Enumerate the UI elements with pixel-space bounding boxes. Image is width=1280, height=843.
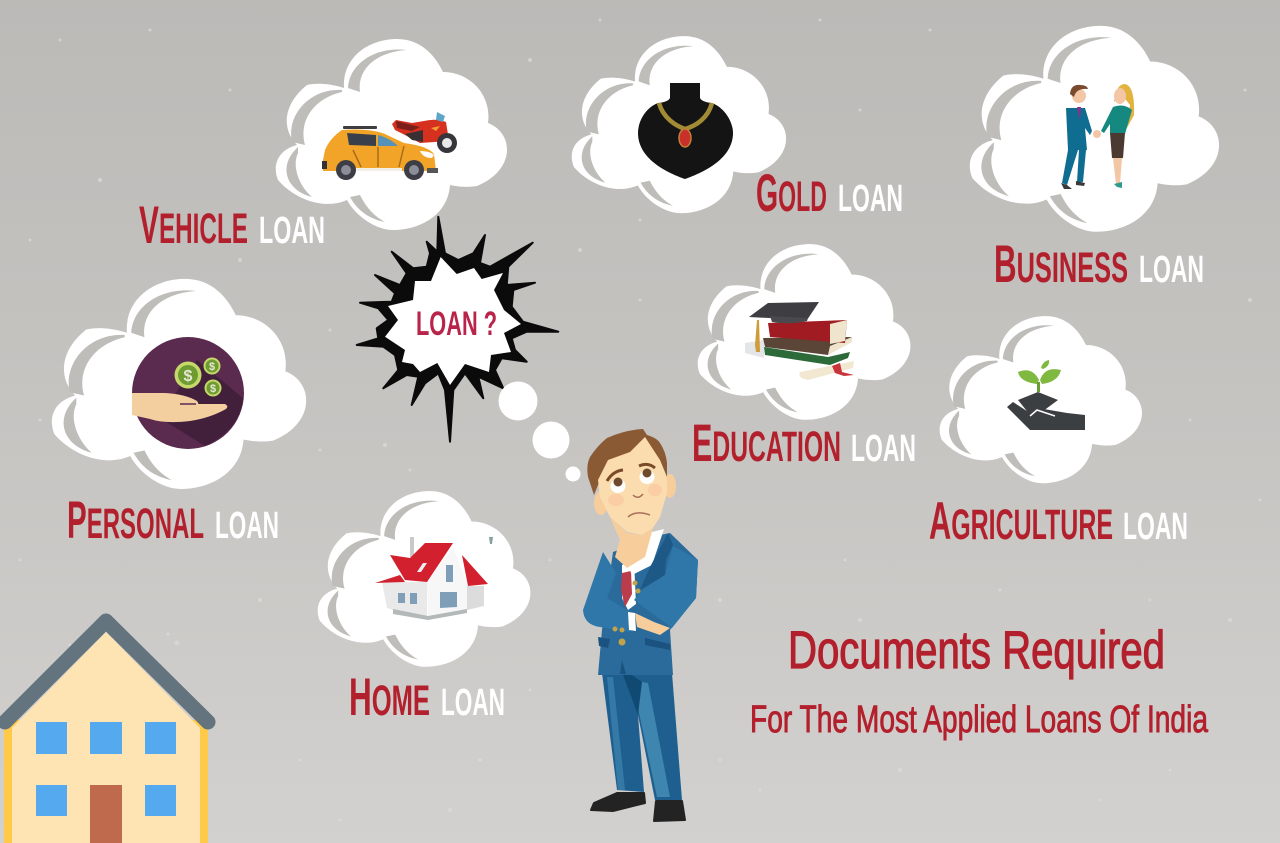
icon: hand with coins: $: [184, 368, 193, 385]
cloud: business: [970, 26, 1219, 232]
cloud: personal: [52, 279, 306, 489]
label: agriculture loan: AGRICULTURE: [929, 492, 1113, 551]
icon: plant in hand: [1007, 360, 1085, 430]
cloud: gold: [572, 36, 786, 213]
label: burst speech bubble: [357, 217, 558, 442]
icon: car: [322, 126, 438, 180]
icon: motorcycle: [392, 112, 457, 153]
label: personal loan: LOAN: [215, 505, 279, 547]
text: loan question: LOAN ?: [416, 305, 497, 343]
label: gold loan: LOAN: [838, 178, 903, 220]
icon: big house: [4, 621, 208, 843]
label: vehicle loan: LOAN: [259, 210, 325, 252]
icon: hand with coins: $: [210, 383, 216, 395]
thought bubbles: [498, 382, 580, 482]
label: business loan: LOAN: [1139, 249, 1204, 291]
label: education loan: LOAN: [851, 428, 916, 470]
icon: hand with coins: [132, 337, 244, 449]
label: gold loan: GOLD: [756, 164, 827, 223]
cloud: education: [698, 244, 910, 420]
cloud: vehicle: [276, 39, 507, 230]
windows: [36, 722, 176, 816]
icon: books and graduation cap: [745, 302, 854, 380]
cloud: home: [318, 491, 530, 667]
icon: hand with coins: $: [209, 361, 215, 373]
icon: necklace: [638, 83, 733, 179]
title: Documents Required: [788, 621, 1165, 680]
label: education loan: EDUCATION: [692, 414, 841, 473]
label: business loan: BUSINESS: [994, 235, 1128, 294]
icon: small house: [375, 537, 493, 620]
label: personal loan: PERSONAL: [67, 491, 204, 550]
icon: business people: [1061, 84, 1134, 189]
label: home loan: HOME: [349, 668, 430, 727]
label: home loan: LOAN: [441, 682, 505, 724]
label: agriculture loan: LOAN: [1123, 506, 1188, 548]
cloud: agriculture: [940, 316, 1142, 483]
label: vehicle loan: VEHICLE: [139, 196, 248, 255]
figure: thinking man: [583, 429, 698, 821]
